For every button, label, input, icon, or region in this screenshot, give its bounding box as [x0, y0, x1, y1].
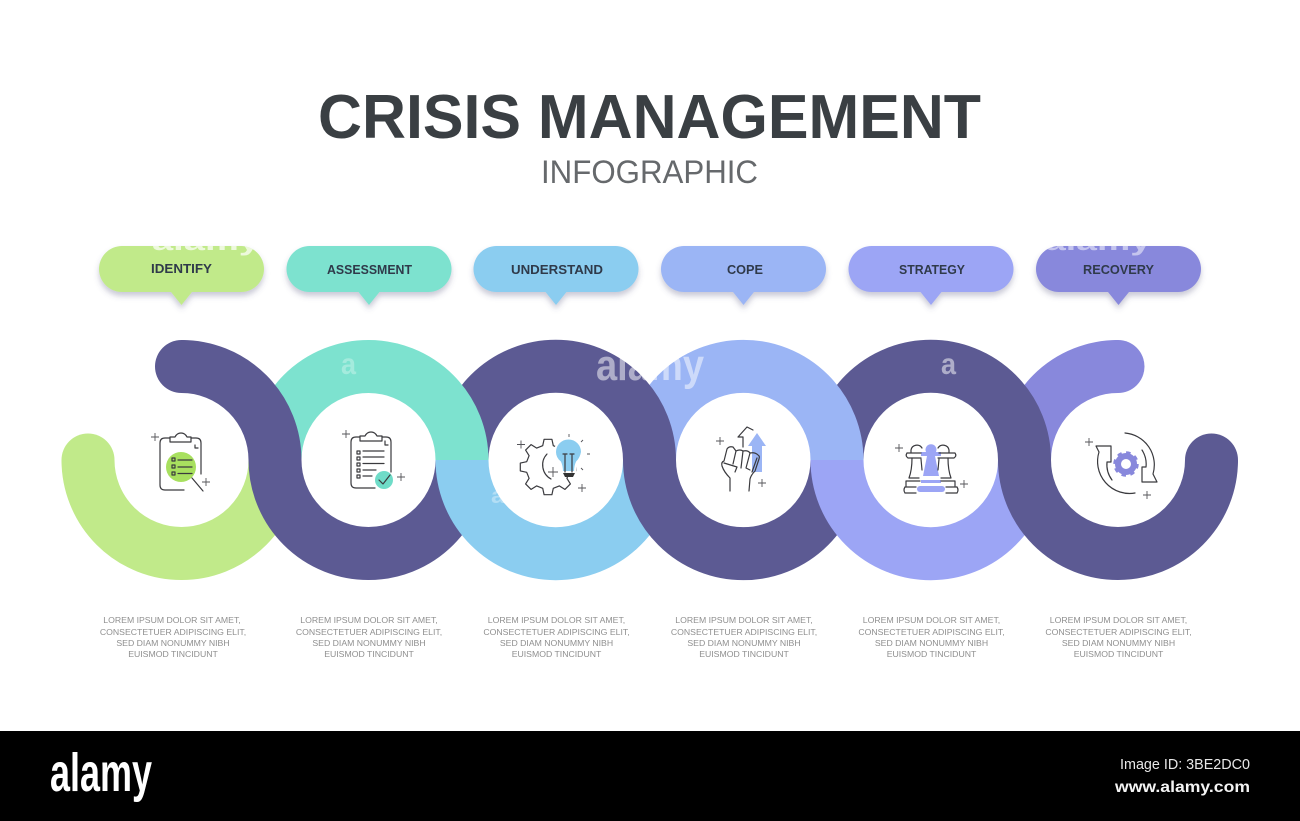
description: assessment: CONSECTETUER ADIPISCING ELIT,	[296, 627, 442, 637]
stock watermark fragments: alamy	[596, 341, 704, 390]
stock watermark fragments: a	[341, 348, 356, 381]
ring segment: periwinkle upper	[650, 366, 837, 460]
title: CRISIS MANAGEMENT	[318, 83, 981, 152]
stock watermark fragments: a	[941, 348, 956, 381]
label: identify: IDENTIFY	[151, 262, 213, 276]
description: strategy: LOREM IPSUM DOLOR SIT AMET,	[863, 615, 1000, 625]
description: recovery: EUISMOD TINCIDUNT	[1074, 649, 1164, 659]
description: understand: CONSECTETUER ADIPISCING ELIT,	[483, 627, 630, 637]
description: identify: EUISMOD TINCIDUNT	[128, 649, 218, 659]
ring segment: dark lower 4	[650, 460, 837, 554]
icon: gear with light bulb	[517, 434, 590, 495]
label: identify: alamy	[152, 226, 261, 256]
description: cope: SED DIAM NONUMMY NIBH	[687, 638, 801, 648]
description: assessment: EUISMOD TINCIDUNT	[324, 649, 414, 659]
description: understand: LOREM IPSUM DOLOR SIT AMET,	[488, 615, 625, 625]
label: strategy: STRATEGY	[899, 263, 966, 277]
label: assessment: ASSESSMENT	[327, 263, 412, 277]
stock watermark fragments: a	[491, 483, 506, 508]
chain of interlocking rings	[62, 340, 1238, 554]
icon: recovery cycle with gear	[1085, 433, 1157, 499]
label: identify	[96, 246, 266, 310]
label: cope: COPE	[727, 263, 763, 277]
label: recovery: alamy	[1045, 226, 1152, 256]
ring segment: green lower	[62, 434, 275, 554]
icon: clipboard with magnifier	[151, 433, 210, 491]
description: identify: LOREM IPSUM DOLOR SIT AMET,	[103, 615, 241, 625]
description: assessment: LOREM IPSUM DOLOR SIT AMET,	[300, 615, 438, 625]
footer bar	[0, 731, 1300, 821]
ring segment: dark upper 3	[462, 366, 650, 460]
icon: raised fist with arrow	[716, 427, 766, 491]
icon: chess pieces	[895, 444, 968, 493]
label: cope	[661, 246, 826, 305]
description: identify: CONSECTETUER ADIPISCING ELIT,	[100, 627, 246, 637]
description: cope: CONSECTETUER ADIPISCING ELIT,	[671, 627, 817, 637]
subtitle: INFOGRAPHIC	[541, 154, 758, 190]
description: cope: LOREM IPSUM DOLOR SIT AMET,	[675, 615, 813, 625]
label: recovery	[1034, 246, 1204, 310]
label: assessment	[286, 246, 452, 305]
ring segment: dark lower 6	[1024, 434, 1238, 554]
ring segment: dark lower 2	[275, 460, 462, 554]
description: cope: EUISMOD TINCIDUNT	[699, 649, 789, 659]
ring segment: dark upper 1	[155, 340, 275, 460]
ring segment: teal upper	[275, 366, 462, 460]
footer image id: Image ID: 3BE2DC0	[1120, 756, 1250, 773]
description: strategy: EUISMOD TINCIDUNT	[887, 649, 977, 659]
label: strategy	[848, 246, 1014, 305]
ring segment: dark upper 5	[837, 366, 1024, 460]
label: understand	[474, 246, 638, 305]
stock watermark fragments	[341, 341, 956, 508]
label: understand: UNDERSTAND	[511, 263, 603, 277]
description: recovery: LOREM IPSUM DOLOR SIT AMET,	[1050, 615, 1187, 625]
description: recovery: SED DIAM NONUMMY NIBH	[1062, 638, 1175, 648]
description: strategy: CONSECTETUER ADIPISCING ELIT,	[858, 627, 1005, 637]
ring segment: lavender lower	[837, 460, 1024, 554]
footer logo: alamy	[50, 743, 152, 803]
description: understand: EUISMOD TINCIDUNT	[512, 649, 602, 659]
description: recovery: CONSECTETUER ADIPISCING ELIT,	[1045, 627, 1192, 637]
ring segment: purple upper	[1024, 340, 1144, 460]
ring segment: sky blue lower	[462, 460, 650, 554]
description: identify: SED DIAM NONUMMY NIBH	[116, 638, 230, 648]
icon: clipboard with check	[342, 430, 405, 489]
description: strategy: SED DIAM NONUMMY NIBH	[875, 638, 988, 648]
footer url: www.alamy.com	[1114, 779, 1250, 796]
description: understand: SED DIAM NONUMMY NIBH	[500, 638, 613, 648]
description: assessment: SED DIAM NONUMMY NIBH	[312, 638, 426, 648]
label: recovery: RECOVERY	[1083, 263, 1155, 277]
